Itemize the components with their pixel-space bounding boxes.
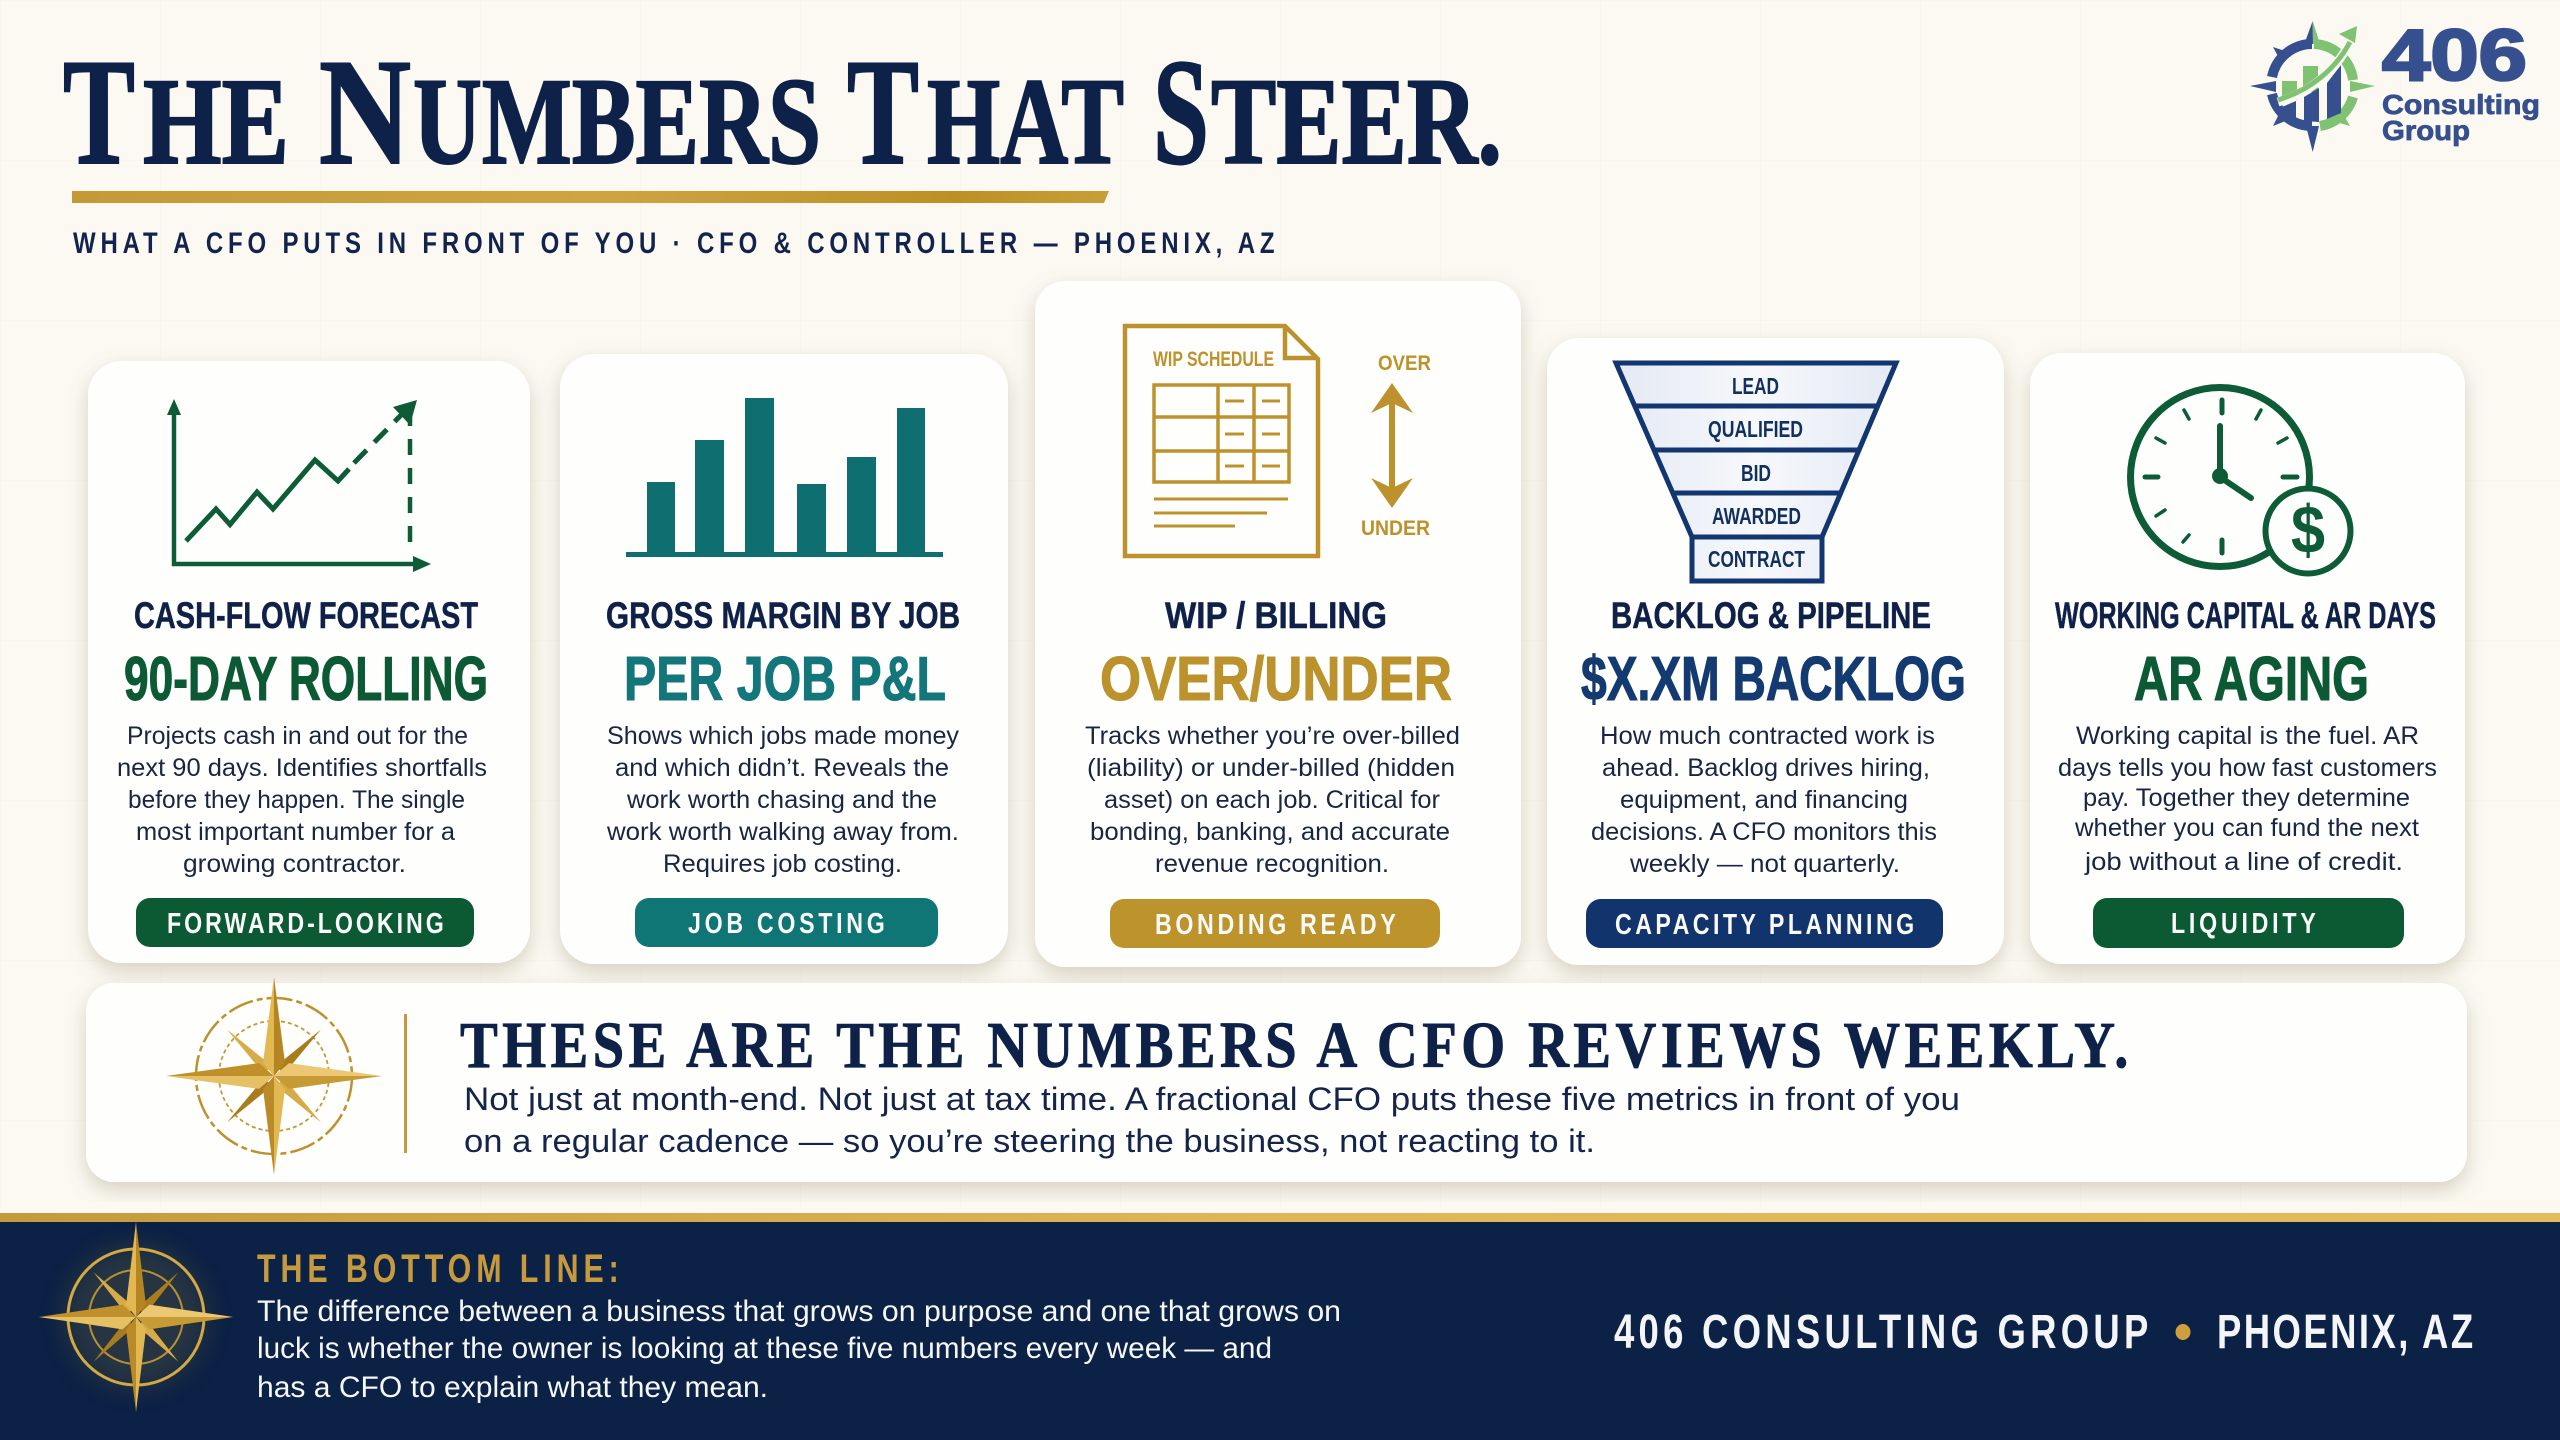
description [2058, 722, 2437, 876]
icon: gold compass [166, 977, 382, 1175]
subtitle: WHAT A CFO PUTS IN FRONT OF YOU · CFO & CONTROLLER — PHOENIX, AZ [73, 225, 1275, 260]
bottom line text [257, 1295, 1341, 1404]
value: PER JOB P&L [624, 645, 946, 714]
footer band [0, 1213, 2560, 1440]
description: pay. Together they determine [2083, 784, 2410, 812]
description: whether you can fund the next [2074, 814, 2419, 842]
description: and which didn’t. Reveals the [615, 754, 949, 782]
heading: WIP / BILLING [1165, 595, 1387, 636]
description: Tracks whether you’re over-billed [1085, 722, 1460, 750]
icon: rising line chart [167, 399, 431, 572]
description: Working capital is the fuel. AR [2076, 722, 2419, 750]
logo wordmark: Group [2382, 115, 2470, 146]
description [1591, 722, 1937, 878]
description: How much contracted work is [1600, 722, 1935, 750]
description: equipment, and financing [1620, 786, 1908, 814]
description: bonding, banking, and accurate [1090, 818, 1450, 846]
bottom line text: The difference between a business that grows on purpose and one that grows on [257, 1295, 1341, 1328]
description: decisions. A CFO monitors this [1591, 818, 1937, 846]
icon: clock with dollar coin [2130, 388, 2350, 574]
gold stripe [0, 1213, 2560, 1222]
description: work worth walking away from. [606, 818, 959, 846]
icon: gold compass on navy [39, 1222, 233, 1412]
title: HE [143, 53, 289, 190]
card background [88, 361, 530, 963]
icon: clock with dollar coin: $ [2291, 491, 2325, 568]
title: TEER. [1211, 53, 1502, 190]
icon: bar chart [626, 398, 943, 557]
description: (liability) or under-billed (hidden [1087, 754, 1455, 782]
pill tag [1110, 899, 1440, 948]
callout text: on a regular cadence — so you’re steering the business, not reacting to it. [464, 1123, 1595, 1159]
description: job without a line of credit. [2084, 848, 2403, 876]
gold rule under title [72, 191, 1109, 203]
title: T [847, 28, 919, 196]
description: work worth chasing and the [626, 786, 937, 814]
description [1085, 722, 1460, 878]
navy background [0, 1222, 2560, 1440]
footer company and location: PHOENIX, AZ [2217, 1305, 2473, 1359]
description: weekly — not quarterly. [1629, 850, 1900, 878]
icon: over/under arrow: OVER [1378, 352, 1431, 375]
card background [560, 354, 1008, 964]
description: days tells you how fast customers [2058, 754, 2437, 782]
icon: pipeline funnel: LEAD [1732, 373, 1779, 399]
pill tag [635, 898, 938, 947]
heading: GROSS MARGIN BY JOB [606, 595, 960, 636]
icon: pipeline funnel: AWARDED [1712, 503, 1801, 529]
icon: over/under arrow: UNDER [1361, 517, 1430, 540]
description: asset) on each job. Critical for [1104, 786, 1440, 814]
panel: gross margin by job [560, 354, 1008, 964]
callout text [464, 1081, 1960, 1159]
icon: WIP schedule document [1125, 326, 1318, 556]
bottom line text: luck is whether the owner is looking at these five numbers every week — and [257, 1332, 1272, 1365]
icon: over/under arrow [1361, 352, 1431, 540]
value: $X.XM BACKLOG [1581, 645, 1966, 714]
panel: cash-flow forecast [88, 361, 530, 963]
icon: pipeline funnel: CONTRACT [1708, 546, 1805, 572]
logo wordmark [2382, 16, 2540, 146]
pill tag: FORWARD-LOOKING [167, 906, 444, 940]
pill tag [1586, 899, 1943, 948]
pill tag: BONDING READY [1155, 907, 1396, 941]
logo compass mark [2250, 21, 2375, 152]
title: UMBERS [413, 53, 821, 190]
description: ahead. Backlog drives hiring, [1602, 754, 1930, 782]
description: before they happen. The single [128, 786, 465, 814]
value: AR AGING [2134, 645, 2369, 714]
pill tag [136, 898, 474, 947]
logo: 406 Consulting Group [2250, 16, 2540, 152]
footer company and location [1614, 1305, 2473, 1359]
footer company and location: 406 CONSULTING GROUP [1614, 1305, 2148, 1359]
description: next 90 days. Identifies shortfalls [117, 754, 487, 782]
title: N [319, 28, 411, 196]
description [117, 722, 487, 878]
description: growing contractor. [183, 850, 406, 878]
card background [1035, 281, 1521, 967]
divider [404, 1014, 407, 1153]
pill tag: LIQUIDITY [2171, 906, 2316, 940]
title: S [1153, 28, 1209, 196]
callout panel [86, 977, 2467, 1182]
icon: pipeline funnel: QUALIFIED [1708, 416, 1803, 442]
icon: WIP schedule document: WIP SCHEDULE [1153, 348, 1274, 371]
heading: CASH-FLOW FORECAST [134, 595, 478, 636]
value: 90-DAY ROLLING [124, 645, 488, 714]
callout background [86, 983, 2467, 1182]
callout heading: THESE ARE THE NUMBERS A CFO REVIEWS WEEKLY. [460, 1009, 2128, 1082]
title: T [63, 28, 135, 196]
description: Projects cash in and out for the [127, 722, 468, 750]
pill tag: CAPACITY PLANNING [1615, 907, 1914, 941]
title: HAT [927, 53, 1124, 190]
description: most important number for a [136, 818, 455, 846]
heading: BACKLOG & PIPELINE [1611, 595, 1931, 636]
icon: pipeline funnel [1616, 363, 1896, 581]
callout text: Not just at month-end. Not just at tax time. A fractional CFO puts these five metrics in front of you [464, 1081, 1960, 1117]
card background [1547, 338, 2004, 965]
logo wordmark: Consulting [2382, 89, 2540, 120]
value: OVER/UNDER [1100, 645, 1452, 714]
logo wordmark: 406 [2382, 16, 2527, 96]
pill tag: JOB COSTING [688, 906, 885, 940]
description: Requires job costing. [663, 850, 902, 878]
pill tag [2093, 898, 2404, 948]
description: Shows which jobs made money [607, 722, 960, 750]
panel: backlog and pipeline [1547, 338, 2004, 965]
panel: WIP / billing [1035, 281, 1521, 967]
panel: working capital and AR days [2030, 353, 2465, 964]
description: revenue recognition. [1155, 850, 1389, 878]
bottom line text: has a CFO to explain what they mean. [257, 1371, 768, 1404]
bottom line heading: THE BOTTOM LINE: [257, 1246, 619, 1291]
description [606, 722, 960, 878]
icon: pipeline funnel: BID [1741, 460, 1771, 486]
card background [2030, 353, 2465, 964]
